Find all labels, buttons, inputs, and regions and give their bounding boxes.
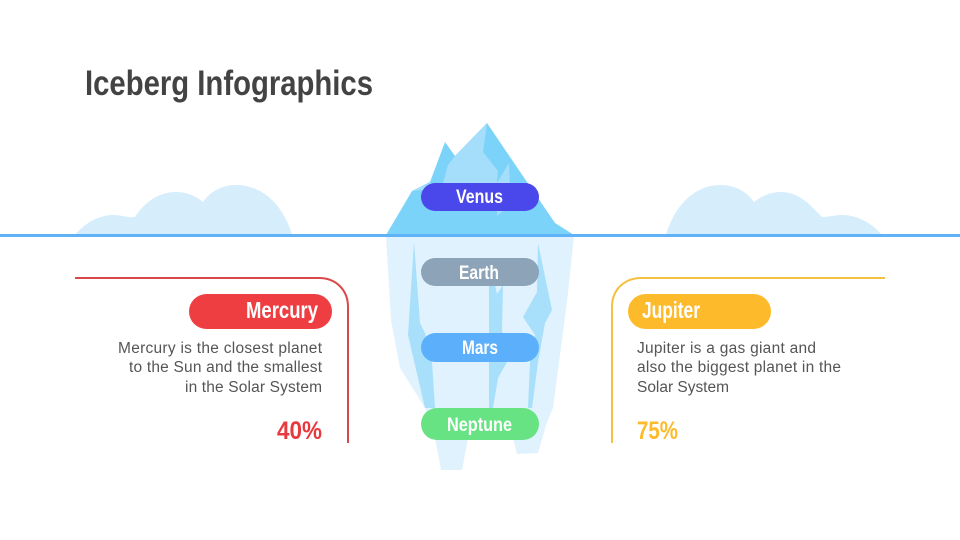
label: Earth: [421, 258, 539, 286]
label: Mars: [421, 333, 539, 362]
label: Venus: Venus: [456, 187, 503, 208]
iceberg: submerged part: [386, 236, 574, 470]
label: Neptune: Neptune: [447, 415, 512, 436]
Mercury description: to the Sun and the smallest: [129, 359, 323, 376]
Jupiter description: Jupiter is a gas giant and: [637, 340, 816, 357]
Mercury bracket line: [75, 278, 348, 443]
label: Mars: Mars: [462, 338, 498, 359]
water line: [0, 234, 960, 237]
right cloud: [666, 185, 882, 235]
Jupiter percentage: 75%: [637, 417, 678, 445]
iceberg: [386, 123, 574, 470]
label: Earth: Earth: [459, 263, 499, 284]
label: Venus: [421, 183, 539, 211]
title: Iceberg Infographics: [85, 64, 373, 103]
Jupiter description: Solar System: [637, 379, 729, 396]
Jupiter description: [637, 340, 841, 396]
Mercury description: [118, 340, 323, 396]
iceberg: visible tip: [386, 123, 574, 235]
Mercury percentage: 40%: [277, 417, 322, 445]
panel: Jupiter: [612, 278, 885, 445]
label: Neptune: [421, 408, 539, 440]
Jupiter description: also the biggest planet in the: [637, 359, 841, 376]
Mercury pill heading: Mercury: [246, 297, 318, 323]
Mercury description: Mercury is the closest planet: [118, 340, 323, 357]
Jupiter pill heading: [628, 294, 771, 329]
left cloud: [75, 185, 292, 235]
Mercury description: in the Solar System: [185, 379, 322, 396]
Jupiter bracket line: [612, 278, 885, 443]
panel: Mercury: [75, 278, 348, 445]
Mercury pill heading: [189, 294, 332, 329]
Jupiter pill heading: Jupiter: [642, 297, 700, 323]
